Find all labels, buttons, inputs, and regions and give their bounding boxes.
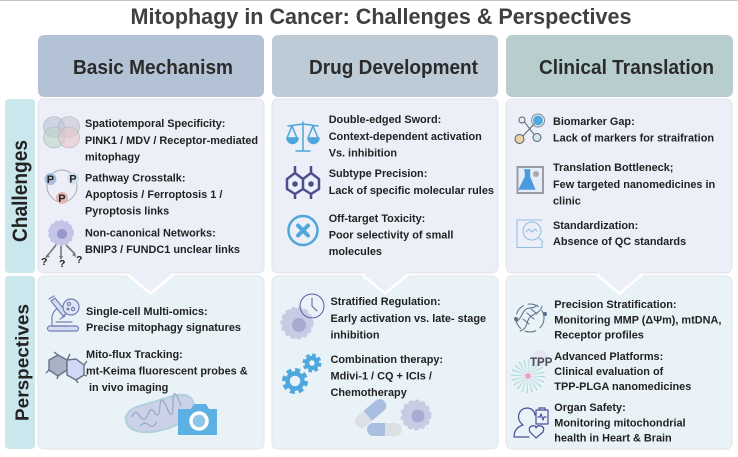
row label: Challenges <box>5 99 35 273</box>
panel: Challenges, Clinical Translation <box>506 99 732 294</box>
text: Combination therapy: Mdivi-1 / CQ + ICIs / <box>330 370 432 382</box>
text: Combination therapy <box>330 354 443 399</box>
text: Off-target Toxicity: Poor selectivity of small <box>329 230 453 242</box>
text: Single-cell Multi-omics: Single-cell Multi-omics: <box>86 306 208 318</box>
text: Organ Safety <box>554 402 686 444</box>
row label: Perspectives: Perspectives <box>12 304 32 421</box>
icon: cross in circle <box>288 216 318 245</box>
text: Combination therapy: Chemotherapy <box>330 387 407 399</box>
panel: Perspectives, Clinical Translation <box>506 276 732 449</box>
column header: Drug Development: Drug Development <box>309 57 478 79</box>
icon: phosphorylation ring: P <box>69 174 77 186</box>
text: Organ Safety: Monitoring mitochondrial <box>554 418 686 430</box>
text: Precision Stratification: Precision Stratification: <box>554 299 677 311</box>
text: Biomarker Gap: Lack of markers for straifration <box>553 132 714 144</box>
text: Mito-flux Tracking: mt-Keima fluorescent probes & <box>86 366 248 378</box>
text: Mito-flux Tracking: Mito-flux Tracking: <box>86 349 183 361</box>
text: Biomarker Gap: Biomarker Gap: <box>553 116 635 128</box>
text: Organ Safety: Organ Safety: <box>554 402 626 414</box>
illustration: mitochondrion with camera <box>126 394 217 435</box>
text: Spatiotemporal Specificity: mitophagy <box>85 152 140 164</box>
text: Subtype Precision <box>329 168 494 197</box>
text: Double-edged Sword: Context-dependent activation <box>329 131 482 143</box>
icon: phosphorylation ring: P <box>58 193 66 205</box>
icon: hexagon molecule <box>287 166 319 199</box>
icon: clock <box>300 294 324 318</box>
text: Mito-flux Tracking: in vivo imaging <box>89 382 168 394</box>
panel: Perspectives, Basic Mechanism <box>38 276 264 449</box>
row label: Perspectives <box>5 276 35 449</box>
text: Precision Stratification <box>554 299 721 342</box>
text: Pathway Crosstalk <box>85 172 222 218</box>
icon: phosphorylation ring <box>44 170 79 205</box>
text: Advanced Platforms: Clinical evaluation of <box>554 366 664 378</box>
column header: Clinical Translation <box>506 35 733 97</box>
text: Precision Stratification: Monitoring MMP (ΔΨm), mtDNA, <box>554 314 721 326</box>
icon: quality control chart <box>517 220 543 248</box>
icon: molecule <box>46 352 87 383</box>
text: Double-edged Sword: Vs. inhibition <box>329 148 397 160</box>
icon: DNA <box>514 304 546 332</box>
text: Advanced Platforms <box>554 351 691 393</box>
panel: Challenges, Drug Development <box>272 99 498 294</box>
icon: unknown signalling cell: ? <box>59 258 65 270</box>
icon: biomarker network <box>515 114 544 144</box>
text: Pathway Crosstalk: Pyroptosis links <box>85 206 169 218</box>
icon: microscope <box>48 296 79 331</box>
text: Non-canonical Networks <box>85 228 240 256</box>
text: Stratified Regulation: Early activation vs. late- stage <box>330 313 486 325</box>
text: Translation Bottleneck: Translation Bottleneck; <box>553 162 673 174</box>
icon: unknown signalling cell <box>41 221 82 270</box>
illustration: pills and cell <box>352 397 430 436</box>
panel: Challenges, Basic Mechanism <box>38 99 264 294</box>
column header: Clinical Translation: Clinical Translation <box>539 57 714 79</box>
text: Biomarker Gap <box>553 116 714 144</box>
text: Spatiotemporal Specificity <box>85 118 258 164</box>
text: Translation Bottleneck <box>553 162 715 208</box>
text: Off-target Toxicity <box>329 213 453 258</box>
text: Advanced Platforms: Advanced Platforms: <box>554 351 663 363</box>
text: Double-edged Sword <box>329 114 482 160</box>
icon: gears <box>284 355 320 392</box>
text: Double-edged Sword: Double-edged Sword: <box>329 114 441 126</box>
panel: Perspectives, Drug Development <box>272 276 498 449</box>
icon: balance scales <box>287 122 319 151</box>
column header: Drug Development <box>272 35 498 97</box>
column header: Basic Mechanism: Basic Mechanism <box>73 57 233 79</box>
text: Mito-flux Tracking <box>86 349 248 394</box>
text: Standardization: Standardization: <box>553 220 638 232</box>
text: Non-canonical Networks: Non-canonical Networks: <box>85 228 216 240</box>
icon: overlapping circles <box>44 116 80 148</box>
title: Mitophagy in Cancer: Challenges & Perspectives <box>130 4 632 29</box>
icon: TPP nanoparticle <box>518 350 553 386</box>
text: Single-cell Multi-omics <box>86 306 241 334</box>
text: Pathway Crosstalk: Apoptosis / Ferroptosis 1 / <box>85 189 222 201</box>
icon: flask in frame <box>518 167 543 193</box>
text: Non-canonical Networks: BNIP3 / FUNDC1 unclear links <box>85 244 240 256</box>
arrow: challenges to perspectives <box>596 272 643 294</box>
icon: tumour cell <box>282 308 312 338</box>
arrow: challenges to perspectives <box>361 272 409 294</box>
text: Subtype Precision: Subtype Precision: <box>329 168 427 180</box>
text: Single-cell Multi-omics: Precise mitophagy signatures <box>86 322 241 334</box>
text: Stratified Regulation <box>330 296 486 342</box>
text: Stratified Regulation: inhibition <box>330 330 380 342</box>
row label: Challenges: Challenges <box>9 140 32 242</box>
text: Spatiotemporal Specificity: PINK1 / MDV / Receptor-mediated <box>85 135 258 147</box>
text: Organ Safety: health in Heart & Brain <box>554 432 672 444</box>
text: Off-target Toxicity: Off-target Toxicity: <box>329 213 425 225</box>
icon: unknown signalling cell: ? <box>41 256 47 268</box>
text: Advanced Platforms: TPP-PLGA nanomedicines <box>554 381 691 393</box>
icon: TPP nanoparticle: TPP <box>530 357 553 369</box>
text: Spatiotemporal Specificity: Spatiotemporal Specificity: <box>85 118 225 130</box>
arrow: challenges to perspectives <box>127 272 174 294</box>
text: Translation Bottleneck: Few targeted nanomedicines in <box>553 179 715 191</box>
text: Stratified Regulation: Stratified Regulation: <box>330 296 441 308</box>
column header: Basic Mechanism <box>38 35 264 97</box>
text: Subtype Precision: Lack of specific molecular rules <box>329 185 494 197</box>
text: Combination therapy: Combination therapy: <box>330 354 443 366</box>
text: Off-target Toxicity: molecules <box>329 246 382 258</box>
text: Precision Stratification: Receptor profiles <box>554 330 644 342</box>
text: Standardization <box>553 220 686 248</box>
text: Pathway Crosstalk: Pathway Crosstalk: <box>85 172 185 184</box>
icon: unknown signalling cell: ? <box>76 254 82 266</box>
icon: phosphorylation ring: P <box>47 174 54 186</box>
text: Standardization: Absence of QC standards <box>553 236 686 248</box>
text: Translation Bottleneck: clinic <box>553 196 581 208</box>
icon: organ safety <box>514 408 548 438</box>
